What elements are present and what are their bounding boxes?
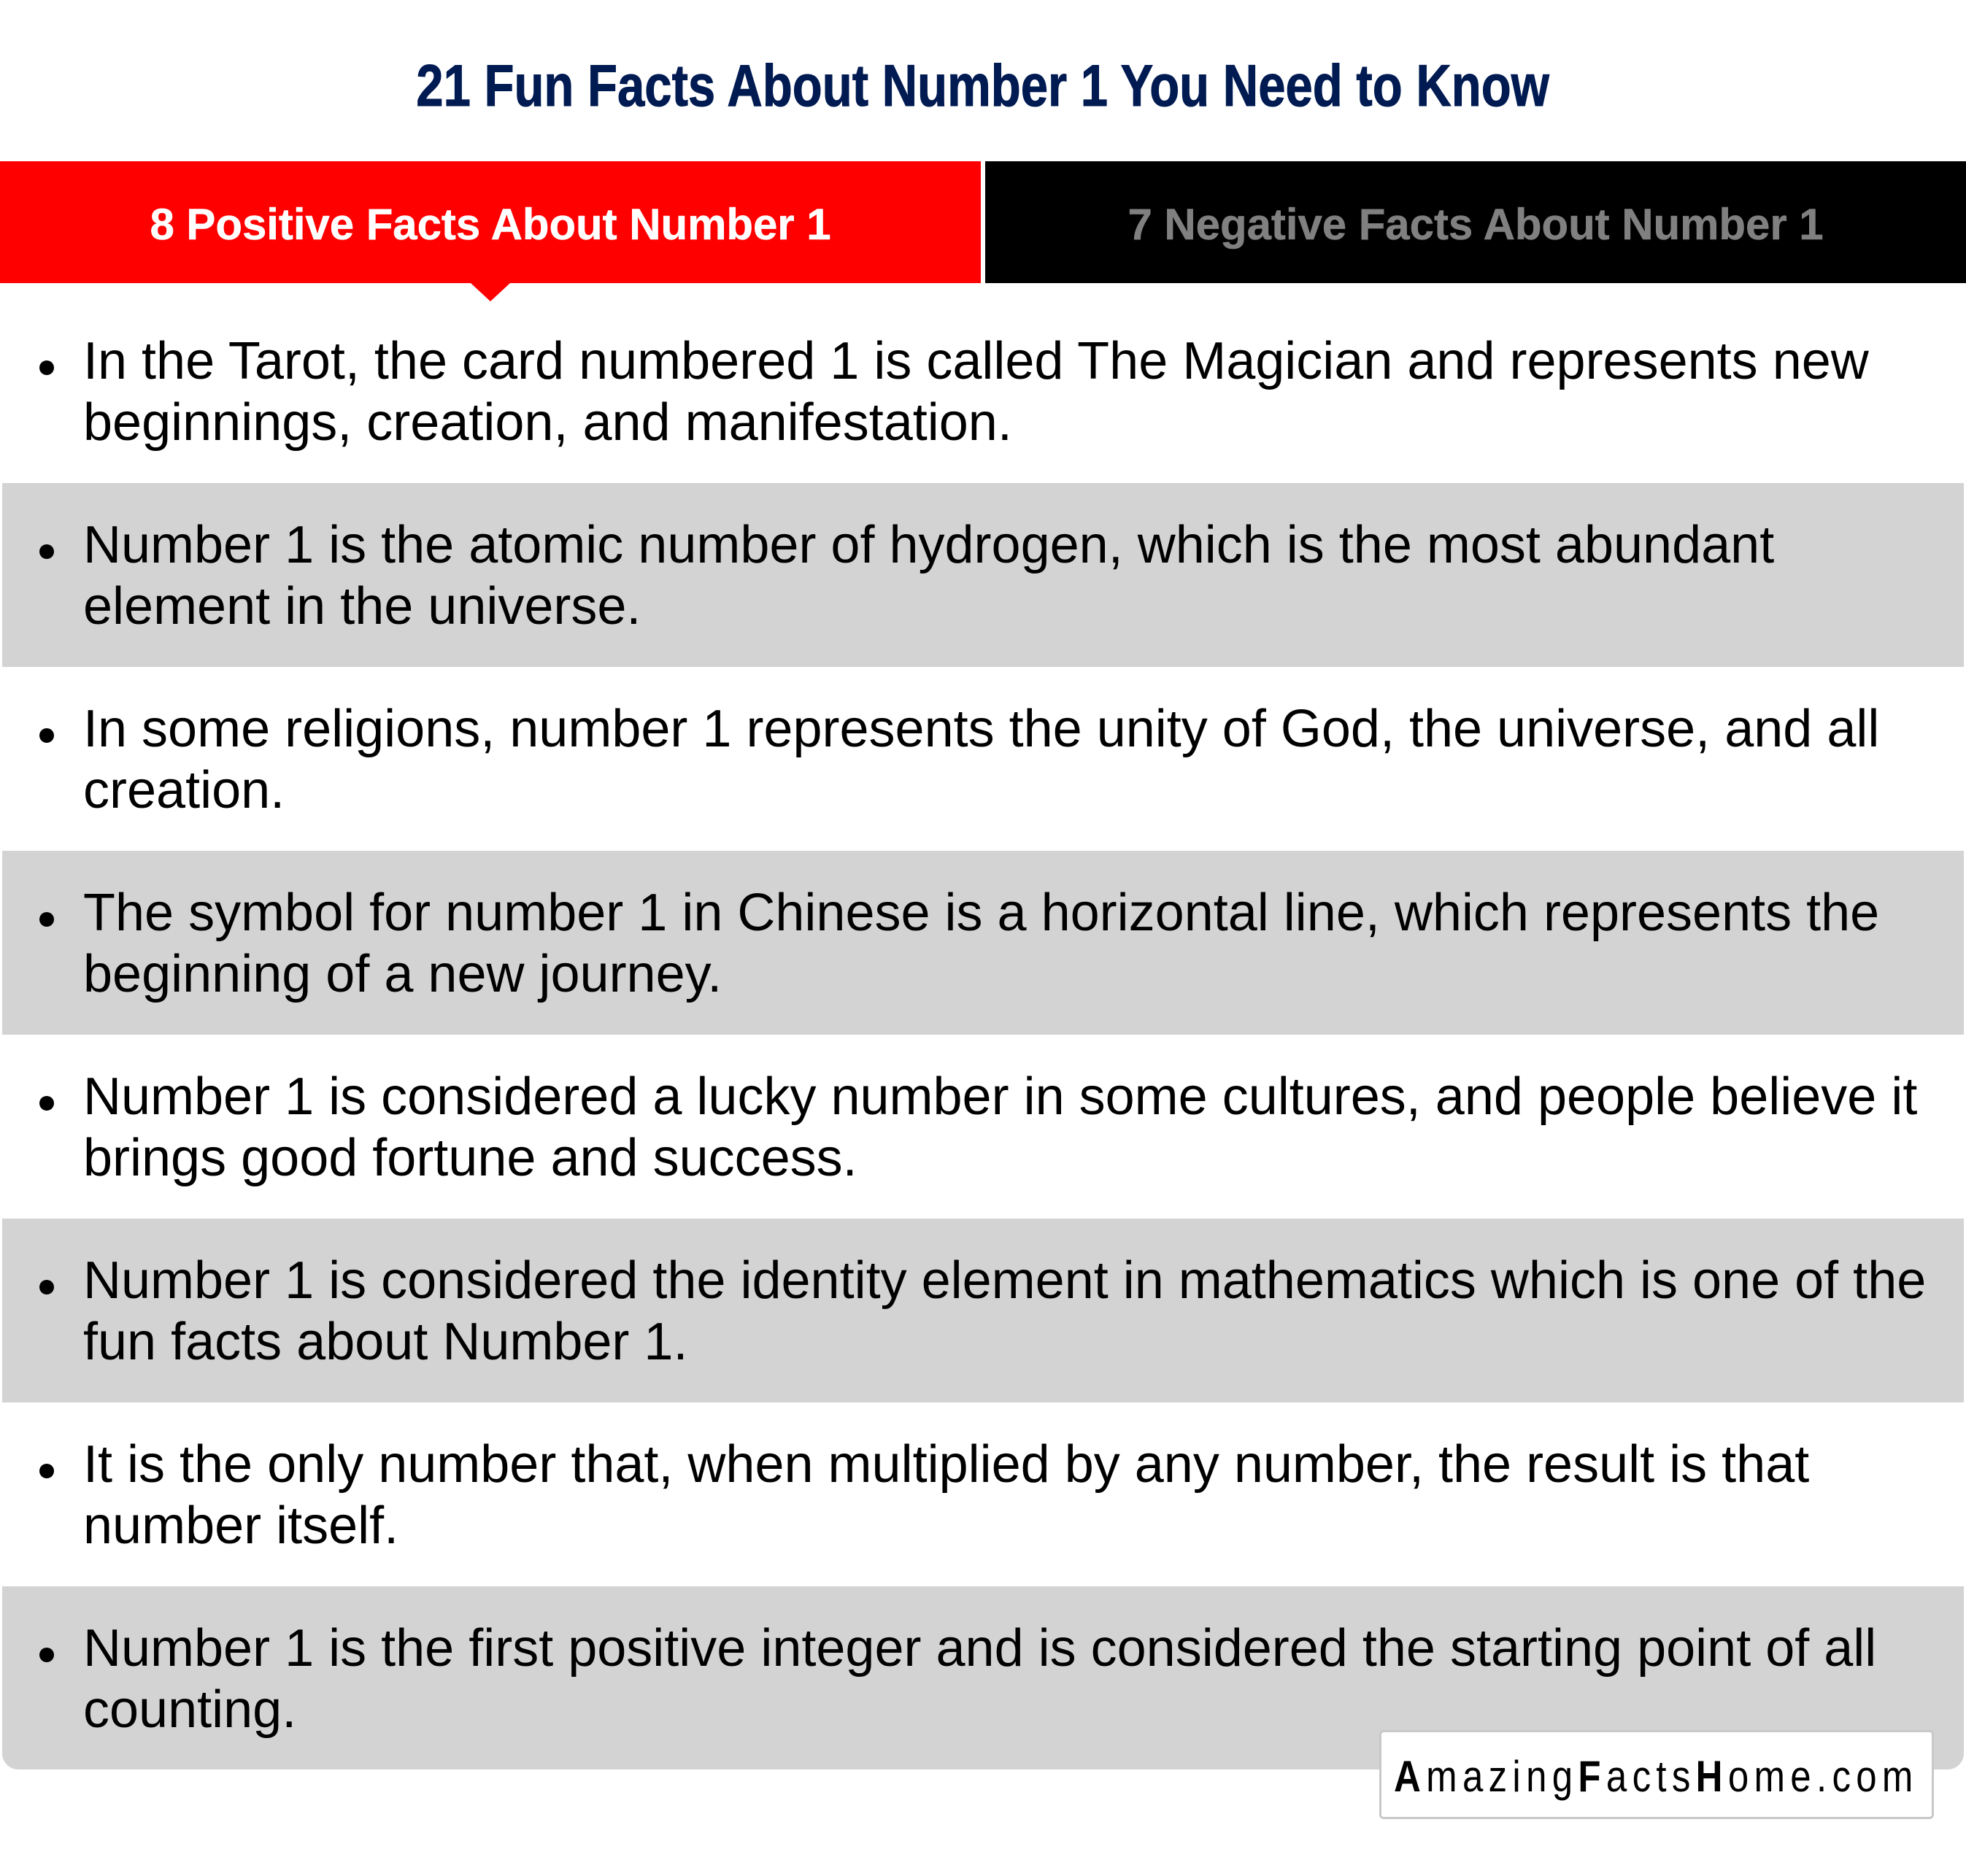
- fact 4 text: beginning of a new journey.: [83, 945, 722, 1003]
- fact 5 text: [83, 1068, 1917, 1187]
- fact 5 text: Number 1 is considered a lucky number in some cultures, and people believe it: [83, 1068, 1917, 1126]
- fact 6 text: [83, 1251, 1926, 1371]
- fact 3 text: In some religions, number 1 represents the unity of God, the universe, and all: [83, 700, 1879, 758]
- fact 6 text: fun facts about Number 1.: [83, 1313, 687, 1371]
- panel: fact 6: [2, 1219, 1964, 1402]
- panel: fact 2: [2, 483, 1964, 667]
- fact 7 text: It is the only number that, when multiplied by any number, the result is that: [83, 1435, 1809, 1494]
- tab pointer: [471, 283, 510, 301]
- fact 1 text: In the Tarot, the card numbered 1 is called The Magician and represents new: [83, 332, 1869, 390]
- fact 3 text: [83, 700, 1879, 819]
- fact 8 text: [83, 1619, 1876, 1739]
- panel: fact 4: [2, 851, 1964, 1035]
- tab: positive facts: [0, 161, 981, 283]
- bullet 5: [39, 1096, 54, 1111]
- fact 1 text: beginnings, creation, and manifestation.: [83, 393, 1012, 452]
- tab: positive facts: 8 Positive Facts About Number 1: [150, 200, 831, 249]
- bullet 8: [39, 1648, 54, 1662]
- panel: fact 8: [2, 1586, 1964, 1769]
- fact 5 text: brings good fortune and success.: [83, 1129, 857, 1187]
- bullet 1: [39, 360, 54, 375]
- fact 1 text: [83, 332, 1869, 452]
- fact 8 text: counting.: [83, 1680, 296, 1739]
- fact 4 text: [83, 884, 1879, 1003]
- fact 2 text: element in the universe.: [83, 577, 641, 636]
- fact 3 text: creation.: [83, 761, 285, 819]
- fact 4 text: The symbol for number 1 in Chinese is a horizontal line, which represents the: [83, 884, 1879, 942]
- fact 2 text: Number 1 is the atomic number of hydrogen, which is the most abundant: [83, 516, 1774, 574]
- bullet 2: [39, 544, 54, 559]
- bullet 6: [39, 1280, 54, 1294]
- tab: negative facts: [985, 161, 1966, 283]
- title: 21 Fun Facts About Number 1 You Need to Know: [417, 53, 1549, 119]
- bullet 7: [39, 1464, 54, 1478]
- fact 8 text: Number 1 is the first positive integer and is considered the starting point of all: [83, 1619, 1876, 1678]
- fact 7 text: [83, 1435, 1809, 1555]
- logo: AmazingFactsHome.com: [1379, 1730, 1934, 1819]
- fact 2 text: [83, 516, 1774, 636]
- logo: AmazingFactsHome.com: AmazingFactsHome.com: [1394, 1752, 1919, 1801]
- bullet 3: [39, 728, 54, 743]
- fact 7 text: number itself.: [83, 1497, 398, 1555]
- tab: negative facts: 7 Negative Facts About Number 1: [1127, 200, 1824, 249]
- fact 6 text: Number 1 is considered the identity element in mathematics which is one of the: [83, 1251, 1926, 1310]
- bullet 4: [39, 912, 54, 927]
